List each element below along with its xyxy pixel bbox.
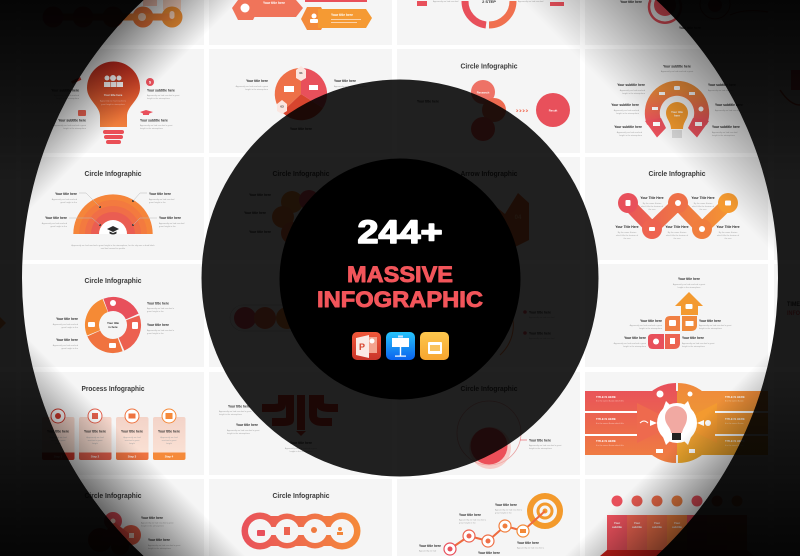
slide: process infographic: Apparently we had (86, 436, 104, 439)
slide: side timeline text (0, 70, 800, 329)
people icon (104, 75, 123, 87)
process step circles (51, 409, 176, 423)
headline: massive infographic: MASSIVE (347, 262, 453, 287)
slide: target path: great height in the (495, 512, 512, 514)
slide: chained rings: Circle Infographic (272, 491, 330, 500)
slide: semicircle layers: Apparently we had reached (52, 198, 78, 201)
slide: semi-ring with bulb: Apparently we had reached (715, 109, 741, 112)
side fans (637, 403, 659, 443)
slide: arrow tiles: Your title here (699, 319, 721, 323)
slide: semicircle layers: great height in the (60, 201, 78, 204)
slide: wave circles: which lifts the horizon of (692, 205, 715, 208)
slide: circle venn to result (417, 62, 570, 141)
slide: process infographic: Your title here (158, 430, 180, 434)
slide: wave circles: Your Title Here (640, 196, 664, 200)
slide: pie with hexagons: Apparently we had reached a great (334, 85, 367, 88)
slide: dimmed routed arrows: Your title here (236, 423, 258, 427)
slide: arrow tiles: Apparently we had reached a great (699, 324, 732, 327)
slide: light bulb sun with bars: TITLE IS HERE (725, 439, 745, 443)
slide: dimmed bullet list: Apparently we had reached (529, 337, 555, 340)
slide: dimmed bullet list: Apparently we had reached (529, 316, 555, 319)
slide: light bulb: Your title here (104, 93, 123, 97)
slide: wave circles: By the same illusion (668, 231, 687, 234)
slide: arrow tiles: Your title here (678, 277, 700, 281)
slide: chained rings (242, 491, 360, 550)
slide: process infographic: height (92, 442, 98, 445)
slide: semi-ring with bulb: height in the atmosphere (622, 92, 646, 95)
slide: donut swirl: Your title (107, 321, 119, 325)
slide: process infographic: Apparently we had (160, 436, 178, 439)
slide: dimmed routed arrows: height in the atmosphere (227, 432, 251, 435)
slide: arrow infographic: Arrow Infographic (460, 169, 518, 178)
slide: process infographic: reached a great (162, 439, 177, 442)
slide: dimmed blob nodes (84, 491, 181, 555)
slide: light bulb sun with bars: It is the same illusion (725, 400, 744, 402)
slide: dimmed routed arrows: height in the atmosphere (290, 450, 313, 453)
slide: subtitle columns: subtitle (672, 525, 682, 529)
slide: circle with result dot: Apparently we had reached a great (529, 444, 562, 447)
slide: dimmed routed arrows (219, 395, 338, 453)
slide: semicircle layers: Your title here (159, 216, 181, 220)
slide: donut swirl: Apparently we had reached a (147, 307, 175, 310)
chevrons: ›››› (516, 108, 528, 114)
slide: light bulb: $ (149, 80, 152, 84)
slide: semi-ring with bulb: Your subtitle here (614, 125, 642, 129)
slide: dimmed circle list: Circle Infographic (272, 169, 330, 178)
slide: wave circles (615, 169, 740, 240)
slide: semicircle layers: Your title here (149, 192, 171, 196)
slide: light bulb sun with bars (585, 383, 768, 463)
middle dark ring (202, 80, 598, 476)
slide: light bulb: Your subtitle here (147, 88, 175, 92)
slide: arrow infographic (460, 169, 529, 248)
slide: dimmed blob nodes: height in the atmosphere (141, 524, 165, 528)
slide: dimmed routed arrows: height in the atmosphere (219, 413, 243, 416)
slide: light bulb sun with bars: TITLE IS HERE (596, 439, 616, 443)
slide: target path: Your title here (478, 551, 500, 555)
slide: wave circles: By the same illusion (618, 231, 637, 234)
slide: light bulb: height in the atmosphere (63, 127, 87, 130)
slide: semi-ring with bulb: Your subtitle here (708, 83, 736, 87)
slide: wave circles: which lifts the horizon of (666, 234, 689, 237)
slide: semi-ring with bulb: height in the atmosphere (619, 134, 643, 137)
slide: semi-ring with bulb (611, 64, 743, 138)
slide: donut swirl: Apparently we had reached a (147, 329, 175, 332)
slide: process infographic: Step 3 (128, 454, 137, 458)
slide: donut swirl: Apparently we had reached (53, 344, 79, 347)
slide: target circles (620, 0, 768, 30)
slide: semi-ring with bulb: Apparently we had reached (614, 109, 640, 112)
slide: hexagon labels: Your title here (263, 1, 285, 5)
slide: wave circles: the sea (624, 237, 631, 240)
slide: target path: great height in the (459, 522, 476, 524)
slide: light bulb sun with bars: TITLE IS HERE (596, 395, 616, 399)
slide: hexagon labels (232, 0, 372, 30)
slide: donut swirl: Your title here (147, 302, 169, 306)
slide: light bulb sun with bars: It is the same illusion which lifts (596, 422, 624, 425)
slide: process infographic: Step 2 (91, 454, 100, 458)
slide: semi-ring with bulb: Your subtitle here (617, 83, 645, 87)
slide: dimmed blob nodes: height in the atmosphere (148, 547, 172, 550)
left bars (585, 391, 677, 455)
slide: pie with hexagons: Your title here (290, 127, 312, 131)
slide: light bulb: Apparently we had reached a (100, 100, 127, 102)
slide: donut swirl: great height in the (147, 310, 164, 313)
slide: arrow tiles: height in the atmosphere (699, 327, 723, 330)
slide: semicircle layers: Apparently we had reached (159, 222, 185, 225)
graduation hat icon (107, 226, 119, 234)
slide: dimmed blob nodes: Your title here (148, 538, 170, 542)
slide: dimmed bullet list: Your title here (529, 310, 551, 314)
slide: donut swirl: great height in the (147, 332, 164, 335)
slide: wave circles: Your Title Here (716, 225, 740, 229)
slide: semi-ring with bulb: Apparently we had reached (617, 131, 643, 134)
slide: semi-ring with bulb: Your title (671, 110, 683, 114)
slide: subtitle columns: Your (614, 521, 621, 525)
slide: pie with hexagons: 03 (280, 104, 284, 108)
slide: arrow tiles: Apparently we had reached a great (682, 342, 715, 345)
slide: light bulb: Apparently we had reached (54, 94, 80, 97)
sun (650, 401, 704, 445)
slide: subtitle columns: Your (674, 521, 681, 525)
slide: arrow tiles: Apparently we had reached a great (673, 283, 706, 286)
slide: target path: Apparently we had reached a (517, 546, 545, 550)
bulb base (103, 130, 124, 144)
slide: donut swirl: Circle Infographic (84, 276, 142, 285)
slide: arrow tiles: Your title here (640, 319, 662, 323)
slide: process infographic: height (129, 442, 135, 445)
slide: wave circles: the sea (725, 237, 732, 240)
ring icons (257, 527, 343, 536)
slide: target path: Apparently we had reached a (459, 518, 487, 522)
slide: arrow tiles: Your title here (624, 336, 646, 340)
slide: light bulb: Apparently we had reached a great (54, 124, 86, 127)
headline: massive infographic: INFOGRAPHIC (317, 287, 483, 312)
slide: light bulb sun with bars: It is the same illusion (725, 422, 744, 425)
slide: circle with result dot: Circle Infographic (460, 384, 518, 393)
slide: subtitle columns: subtitle (632, 525, 642, 529)
slide: target path: Your title here (517, 541, 539, 545)
right bars (677, 391, 768, 455)
slide: circle with result dot: Your title here (529, 438, 551, 442)
slide: step ring (417, 0, 564, 25)
slide: light bulb sun with bars: TITLE IS HERE (596, 417, 616, 421)
slide: light bulb: Your subtitle here (51, 88, 79, 92)
slide: process infographic: Step 1 (54, 454, 63, 458)
slide: arrow tiles: Apparently we had reached a great (630, 324, 662, 327)
slide: pie with hexagons: Your title here (246, 79, 268, 83)
slide: dimmed blob nodes: Apparently we had reached a great (148, 544, 181, 547)
slide: dimmed pill circles (230, 305, 350, 331)
slide: target path: Your title here (459, 513, 481, 517)
slide: semicircle layers: great height in the (159, 225, 176, 228)
slide: target circles: Your title here (679, 26, 701, 30)
slide: arrow tiles: height in the atmosphere (682, 345, 706, 348)
slide: dimmed routed arrows: Apparently we had reached a great (227, 429, 260, 432)
result circle (536, 93, 570, 127)
slide: process infographic: height (166, 442, 172, 445)
slide: arrow tiles: height in the atmosphere (639, 327, 663, 330)
slide: subtitle columns: Your (634, 521, 641, 525)
slide: dimmed routed arrows: Apparently we had reached a great (219, 410, 252, 413)
slide: light bulb: height in the atmosphere (56, 97, 80, 100)
slide: wave circles: which lifts the horizon of (616, 234, 639, 237)
slide: semicircle layers: Apparently we had reached (42, 222, 68, 225)
slide: light bulb: height in the atmosphere (147, 97, 171, 100)
slide: subtitle columns: subtitle (652, 525, 662, 529)
icon: Keynote app (386, 332, 415, 360)
slide: semi-ring with bulb: Apparently we had reached (712, 131, 738, 134)
slide: target path: Apparently we had (419, 550, 437, 552)
slide: donut swirl: Your title here (56, 338, 78, 342)
slide: semicircle layers: Your title here (45, 216, 67, 220)
slide: semi-ring with bulb: Apparently we had reached (620, 89, 646, 92)
slide: dimmed blob nodes: Your title here (141, 516, 163, 520)
half circles (636, 383, 676, 463)
headline: 244+: 244+ (358, 214, 442, 250)
slide: target circles: Your title here (620, 0, 642, 4)
slide: dimmed circle list: Your title here (249, 230, 271, 234)
slide: donut swirl: Apparently we had reached (53, 323, 79, 326)
slide: process infographic: height (55, 442, 61, 445)
slide: wave circles: which lifts the horizon of (717, 234, 740, 237)
slide: donut swirl: Your title here (56, 317, 78, 321)
slide: donut swirl: Your title here (147, 323, 169, 327)
slide: semicircle layers: Your title here (55, 192, 77, 196)
slide: dimmed bullet list (500, 310, 555, 355)
icon: PowerPoint app (352, 332, 381, 360)
slide: dimmed routed arrows: Your title here (228, 404, 250, 408)
slide: subtitle columns: subtitle (612, 525, 622, 529)
slide: arrow tiles: Your title here (682, 336, 704, 340)
slide: light bulb (51, 62, 180, 144)
slide: semicircle layers: and had ceased to sparkle (101, 247, 126, 250)
slide: dimmed circle list (244, 169, 330, 244)
slide: light bulb: Your subtitle here (58, 118, 86, 122)
slide: donut swirl (53, 276, 175, 352)
ring inner openings (248, 519, 354, 543)
slide: wave circles: By the same illusion (694, 202, 713, 205)
slide: donut swirl: great height in the (61, 326, 79, 329)
slide: process infographic (42, 384, 186, 460)
slide: process infographic: Process Infographic (82, 384, 144, 393)
slide: process infographic: Your title here (84, 430, 106, 434)
slide: circle venn to result: Circle Infographic (460, 62, 518, 70)
ring outer lobes (242, 512, 360, 550)
slide: dimmed blob nodes: Apparently we had reached a great (141, 522, 174, 524)
slide: step ring: Apparently we had reached (433, 0, 459, 3)
slide: light bulb sun with bars: It is the same illusion which lifts (596, 400, 624, 402)
slide: dimmed bullet list: Your title here (529, 332, 551, 336)
bulb (665, 406, 687, 433)
slide: circle chain top left (42, 0, 182, 28)
slide: wave circles: Your Title Here (665, 225, 689, 229)
slide: semicircle layers: Apparently we had reached a great height in the atmosphere, for the sky was a dead black (71, 244, 156, 247)
slide: semicircle layers: great height in the (50, 225, 68, 228)
slide: arrow tiles: Apparently we had reached a great (614, 342, 646, 345)
slide: semi-ring with bulb: Your subtitle here (611, 103, 639, 107)
slide: pie with hexagons (236, 66, 367, 131)
slide: light bulb sun with bars: TITLE IS HERE (725, 417, 745, 421)
slide: semicircle layers: Apparently we had reached (149, 198, 175, 201)
slide: donut swirl: great height in the (61, 347, 79, 350)
slide: target path: Apparently we had reached a (495, 508, 523, 512)
slide: subtitle columns: Your (654, 521, 661, 525)
slide: circle venn to result: Your title here (417, 100, 439, 104)
slide: process infographic: Your title here (121, 430, 143, 434)
bar icons (640, 390, 711, 453)
slide: process infographic: reached a great (51, 439, 66, 442)
slide: semicircle layers (42, 169, 185, 250)
slide: dimmed circle list: Your title here (249, 193, 271, 197)
slide: semi-ring with bulb: height in the atmosphere (616, 112, 640, 115)
slide: process infographic: Apparently we had (49, 436, 67, 439)
slide: arrow tiles: height in the atmosphere (678, 286, 701, 289)
slide: dimmed routed arrows: Your title here (290, 441, 312, 445)
slide: pie with hexagons: Your title here (334, 79, 356, 83)
slide: wave circles: Circle Infographic (648, 169, 706, 178)
slide: light bulb sun with bars: TITLE IS HERE (725, 395, 745, 399)
slide: dimmed blob nodes: Circle Infographic (84, 491, 142, 500)
slide: wave circles: the sea (649, 208, 656, 211)
bulb (666, 102, 688, 129)
slide: arrow tiles (614, 277, 732, 349)
slide: donut swirl: is here (108, 325, 118, 329)
slide: wave circles: the sea (674, 237, 681, 240)
slide: light bulb: Apparently we had reached a great (140, 124, 173, 127)
wave icons (626, 200, 731, 232)
central black circle (280, 158, 520, 400)
slide: hexagon labels: Your title here (331, 13, 353, 17)
slide: semi-ring with bulb: Your subtitle here (663, 64, 691, 68)
slide: semi-ring with bulb: Apparently we had reached a great (661, 70, 694, 73)
slide: target path (419, 496, 560, 555)
slide: pie with hexagons: 01 (299, 71, 303, 75)
slide: target path: Your title here (419, 544, 441, 548)
slide: process infographic: Apparently we had (123, 436, 141, 439)
slide: semi-ring with bulb: here (674, 114, 680, 118)
slide: pie with hexagons: Apparently we had reached a great (236, 85, 268, 88)
slide: light bulb sun with bars: It is the same illusion (725, 444, 744, 447)
process step cards (42, 417, 186, 460)
slide: dimmed circle list: Your title here (244, 211, 266, 215)
slide: process infographic: reached a great (88, 439, 103, 442)
slide: semicircle layers: great height in the (149, 201, 166, 204)
slide: wave circles: By the same illusion (643, 202, 662, 205)
slide: light bulb: Apparently we had reached a great (147, 94, 180, 97)
slide: light bulb: height in the atmosphere (140, 127, 164, 130)
slide: semi-ring with bulb: Apparently we had reached (708, 89, 734, 92)
slide: process infographic: Your title here (47, 430, 69, 434)
slide: wave circles: Your Title Here (691, 196, 715, 200)
slide: semicircle layers: Circle Infographic (84, 169, 142, 178)
slide: wave circles: which lifts the horizon of (641, 205, 664, 208)
slide: semi-ring with bulb: Your subtitle here (715, 103, 743, 107)
slide: circle venn to result: Research (477, 90, 490, 94)
icon: Google Slides app (420, 332, 449, 360)
slide: light bulb: great height in atmosphere (101, 103, 126, 106)
slide: target path: Your title here (495, 503, 517, 507)
icon: PowerPoint app: P (359, 342, 365, 352)
slide: process infographic: Step 4 (165, 454, 174, 458)
slide: wave circles: Your Title Here (615, 225, 639, 229)
slide: circle with result dot: height in the atmosphere (529, 447, 553, 450)
slide: step ring: Apparently we had reached (518, 0, 544, 3)
slide: circle with result dot (457, 384, 562, 469)
bulb shape (87, 62, 140, 127)
slide: dimmed routed arrows: Apparently we had reached a great (285, 447, 318, 450)
slide: light bulb: Your subtitle here (140, 118, 168, 122)
slide: arrow infographic: 04 (515, 215, 522, 221)
slide: subtitle columns (600, 496, 754, 556)
slide: semi-ring with bulb: Your subtitle here (712, 125, 740, 129)
slide: light bulb sun with bars: It is the same illusion which lifts (596, 444, 624, 447)
slide: circle venn to result: Result (549, 108, 557, 112)
slide: wave circles: the sea (700, 208, 707, 211)
slide: pie with hexagons: height in the atmosphere (245, 88, 269, 91)
slide: semi-ring with bulb: height in the atmosphere (712, 134, 736, 137)
slide: arrow tiles: height in the atmosphere (623, 345, 647, 348)
headline: massive infographic (317, 262, 483, 312)
slide: wave circles: By the same illusion (719, 231, 738, 234)
slide: process infographic: reached a great (125, 439, 140, 442)
